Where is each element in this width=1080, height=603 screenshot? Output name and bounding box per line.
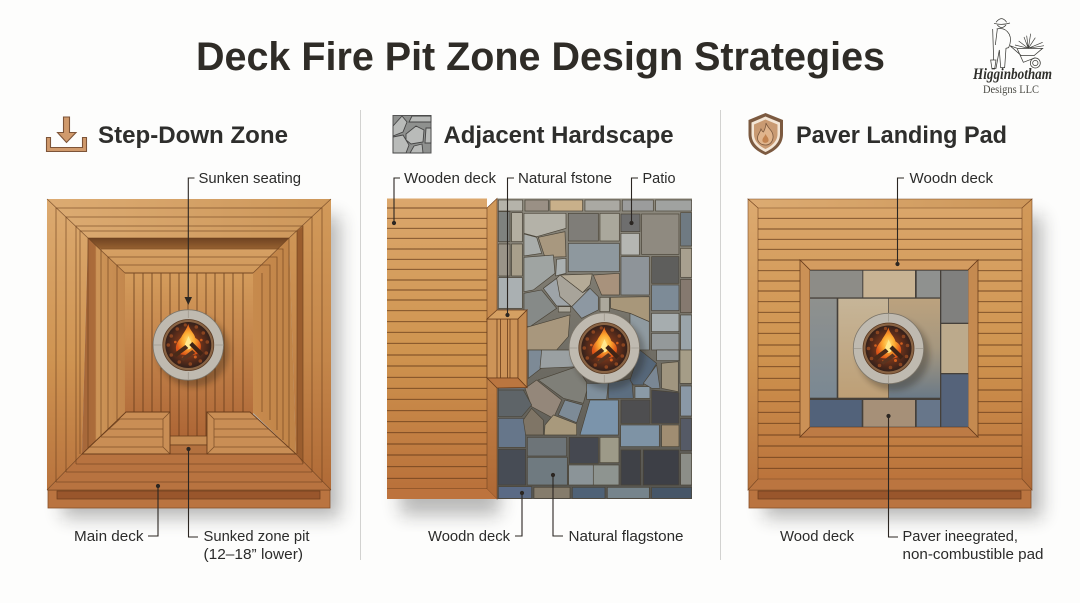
stone pavers: [810, 270, 968, 427]
label: Paver integrated pad: [886, 414, 1044, 563]
drop shadow: [400, 430, 500, 515]
main deck illustration: [47, 199, 331, 508]
label: Sunken seating: Sunken seating: [198, 171, 301, 187]
label: Natural fstone: Natural fstone: [518, 171, 612, 187]
label: Paver integrated pad: non-combustible pad: [902, 547, 1044, 563]
fire pit: [153, 310, 229, 387]
icon: step-down arrow: [46, 117, 86, 152]
icon: flagstone: [393, 116, 431, 153]
wooden deck: [387, 198, 497, 499]
label: Woodn deck: Woodn deck: [910, 171, 994, 187]
label: Wooden deck: [392, 171, 497, 225]
icon: fire shield: [748, 113, 783, 155]
label: Natural flagstone: Natural flagstone: [568, 529, 684, 545]
fire pit: [853, 313, 930, 390]
panel: step-down zone: [46, 117, 340, 563]
drop shadow: [62, 216, 340, 518]
heading: Paver Landing Pad: Paver Landing Pad: [796, 122, 1007, 149]
logo name: Higginbotham: [972, 66, 1052, 83]
deck with plank surface: [748, 199, 1032, 508]
deck step to patio: [487, 310, 527, 388]
label: Main deck: Main deck: [74, 529, 144, 545]
fire pit: [569, 313, 645, 390]
heading: Adjacent Hardscape: Adjacent Hardscape: [444, 122, 674, 149]
label: Patio: [629, 171, 676, 225]
label: Natural flagstone: [551, 473, 684, 545]
label: Natural fstone: [505, 171, 612, 317]
label: Sunken seating: [184, 171, 301, 305]
pad frame: [800, 260, 978, 437]
bench: right: [207, 412, 296, 454]
label: Main deck: [74, 484, 160, 545]
label: Woodn deck: [428, 491, 524, 545]
heading: Step-Down Zone: Step-Down Zone: [98, 122, 288, 149]
label: Sunked zone pit: Sunked zone pit: [204, 529, 310, 545]
label: Wood deck: Wood deck: [780, 529, 855, 545]
label: Woodn deck: Woodn deck: [428, 529, 511, 545]
label: Patio: Patio: [642, 171, 676, 187]
label: Sunked zone pit: [186, 447, 310, 563]
panel: adjacent hardscape: [387, 116, 692, 545]
label: Woodn deck: [895, 171, 994, 266]
label: Paver integrated pad: Paver ineegrated,: [902, 529, 1018, 545]
drop shadow: [764, 216, 1042, 518]
logo: Higginbotham Designs LLC: [972, 19, 1052, 96]
flagstone patio: [497, 198, 692, 499]
logo subtitle: Designs LLC: [983, 84, 1039, 96]
bench: left: [82, 412, 170, 454]
panel: paver landing pad: [748, 113, 1044, 563]
title: Deck Fire Pit Zone Design Strategies: [196, 35, 885, 79]
label: Sunked zone pit: (12–18” lower): [204, 547, 303, 563]
label: Wooden deck: Wooden deck: [404, 171, 497, 187]
